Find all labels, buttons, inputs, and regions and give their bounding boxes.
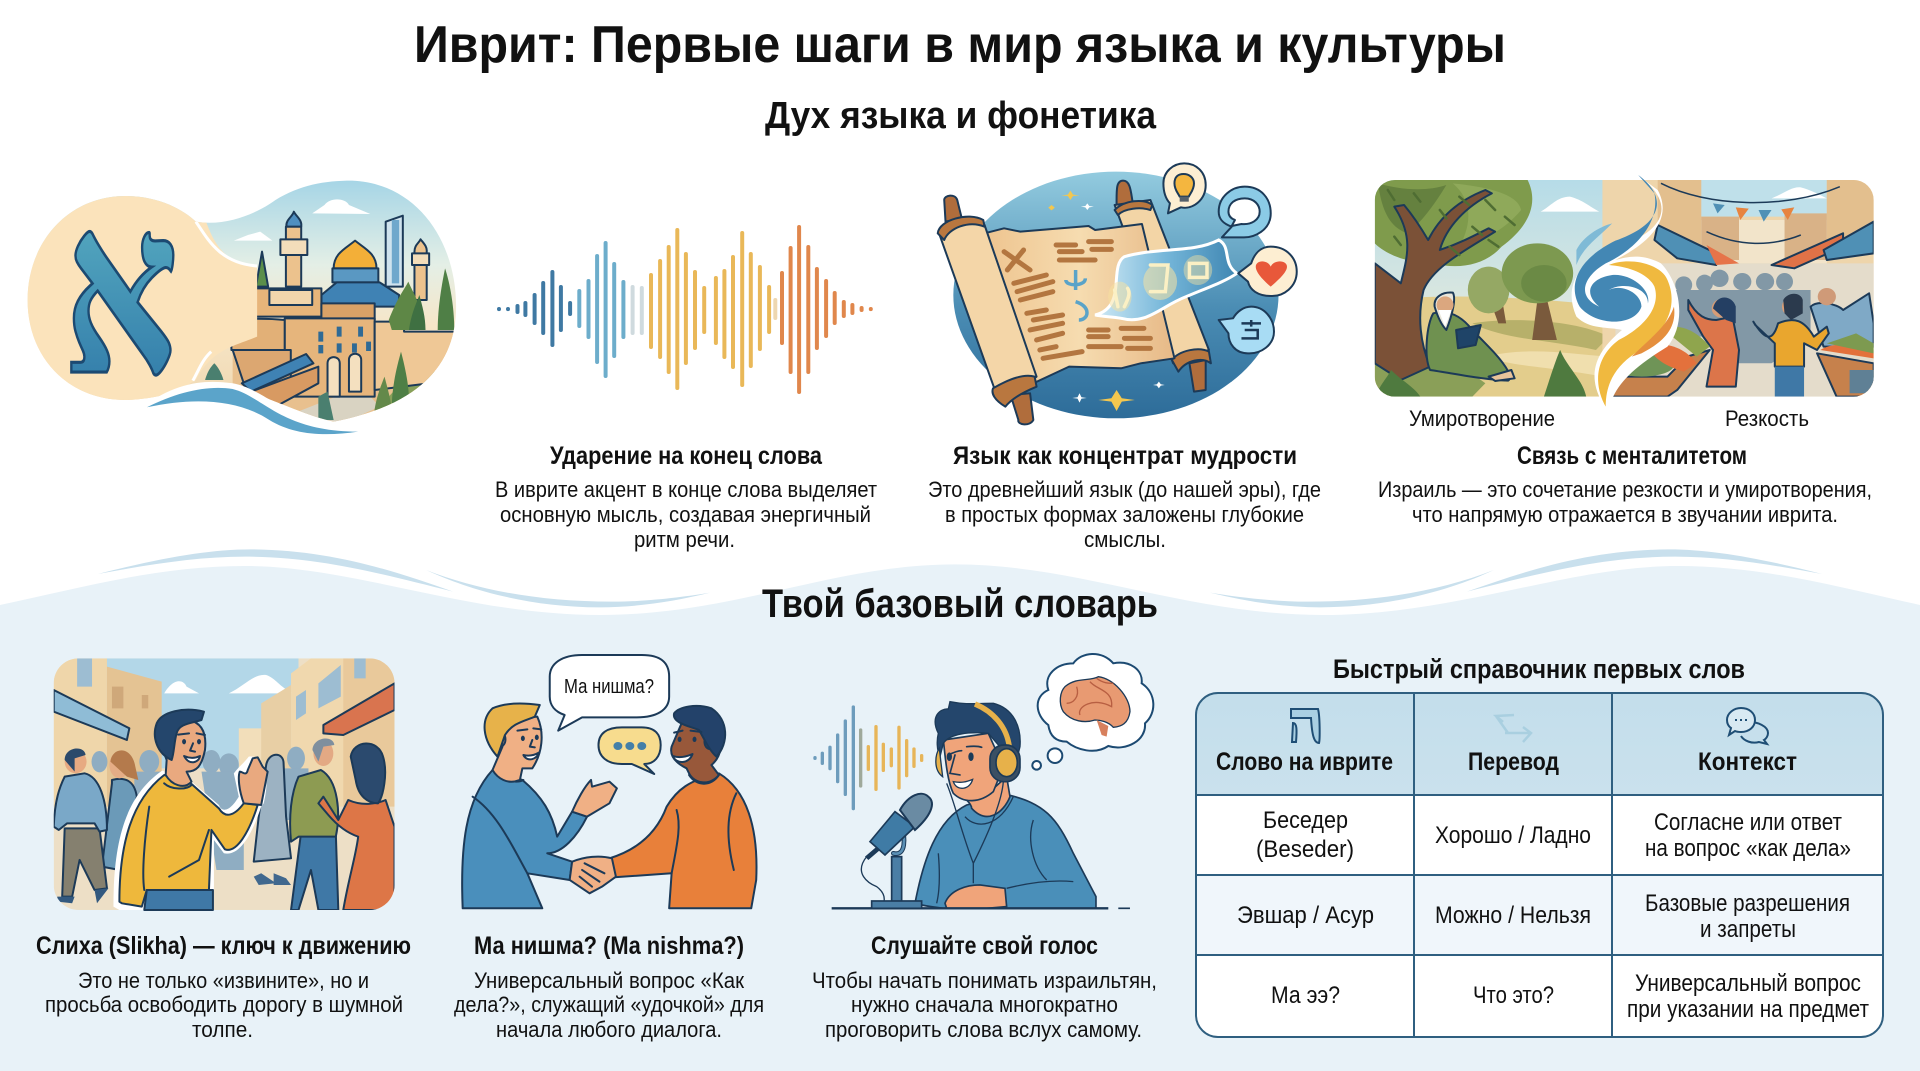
column text: В иврите акцент в конце слова выделяет	[495, 477, 877, 502]
row 1: на вопрос «как дела»	[1645, 835, 1851, 862]
header: hebrew word	[1216, 709, 1393, 776]
speech bubble text: Ма нишма?	[564, 676, 654, 698]
row 1: Хорошо / Ладно	[1435, 822, 1591, 849]
icon: letter aleph: א	[63, 160, 179, 424]
column text: ритм речи.	[634, 527, 735, 552]
row 3	[1271, 970, 1869, 1023]
header: context: Контекст	[1698, 748, 1797, 776]
header: hebrew word: Слово на иврите	[1216, 748, 1393, 776]
row 3: Универсальный вопрос	[1635, 970, 1861, 997]
column text: дела?», служащий «удочкой» для	[454, 992, 764, 1017]
header: translation	[1468, 715, 1559, 776]
column text: Это древнейший язык (до нашей эры), где	[928, 477, 1321, 502]
column text: проговорить слова вслух самому.	[825, 1017, 1142, 1042]
row 3: при указании на предмет	[1627, 996, 1869, 1023]
row 1: (Beseder)	[1256, 836, 1354, 863]
sound wave chart	[499, 227, 871, 392]
header: context	[1698, 708, 1797, 776]
column text: в простых формах заложены глубокие	[945, 502, 1304, 527]
column: hear your own voice	[812, 654, 1157, 1042]
skyline	[386, 216, 403, 287]
section heading: spirit of the language: Дух языка и фонетика	[765, 95, 1157, 137]
column text: просьба освободить дорогу в шумной	[45, 992, 403, 1017]
illustration: crowded street	[54, 658, 395, 910]
section heading: basic vocabulary: Твой базовый словарь	[762, 582, 1158, 626]
row 1	[1256, 807, 1851, 863]
row 3: Что это?	[1473, 982, 1554, 1009]
column text: Израиль — это сочетание резкости и умиротворения,	[1378, 477, 1872, 502]
column: slikha	[36, 658, 411, 1042]
label: sharpness: Резкость	[1725, 406, 1809, 431]
row 3: Ма ээ?	[1271, 982, 1340, 1009]
row 1: Согласне или ответ	[1654, 809, 1842, 836]
lower section background waves	[0, 549, 1920, 1071]
row 1: Беседер	[1263, 807, 1348, 834]
column text: Это не только «извините», но и	[78, 968, 369, 993]
column text: основную мысль, создавая энергичный	[500, 502, 871, 527]
illustration: aleph and Jerusalem	[28, 180, 456, 434]
column text: что напрямую отражается в звучании иврита.	[1412, 502, 1838, 527]
column: language as concentrated wisdom	[928, 163, 1321, 552]
column heading: Ма нишма? (Ma nishma?)	[474, 932, 744, 960]
row 2: и запреты	[1700, 916, 1796, 943]
column heading: Слиха (Slikha) — ключ к движению	[36, 932, 411, 960]
column text: начала любого диалога.	[496, 1017, 722, 1042]
row 2: Можно / Нельзя	[1435, 902, 1591, 929]
illustration: calm and sharpness	[1375, 173, 1876, 408]
illustration: man with microphone	[815, 654, 1153, 908]
column heading: Ударение на конец слова	[550, 442, 823, 470]
row 2: Эвшар / Асур	[1237, 902, 1374, 929]
column: connection to mentality	[1375, 173, 1876, 527]
column text: толпе.	[192, 1017, 253, 1042]
table backgrounds	[1196, 693, 1883, 1037]
column: ma nishma	[454, 655, 764, 1042]
row 2: Базовые разрешения	[1645, 890, 1850, 917]
column heading: Связь с менталитетом	[1517, 442, 1747, 470]
column text: нужно сначала многократно	[851, 992, 1118, 1017]
column heading: Слушайте свой голос	[871, 932, 1098, 960]
quick reference table	[1196, 654, 1883, 1037]
column text: Чтобы начать понимать израильтян,	[812, 968, 1157, 993]
illustration: torah scroll	[938, 163, 1297, 424]
label: calm: Умиротворение	[1409, 406, 1555, 431]
header: translation: Перевод	[1468, 748, 1559, 776]
column heading: Язык как концентрат мудрости	[953, 442, 1297, 470]
column text: смыслы.	[1084, 527, 1166, 552]
column text: Универсальный вопрос «Как	[474, 968, 744, 993]
title: Иврит: Первые шаги в мир языка и культуры	[414, 16, 1506, 74]
table heading: Быстрый справочник первых слов	[1333, 654, 1745, 684]
row 2	[1237, 890, 1850, 943]
column: stress at word end	[495, 227, 877, 552]
illustration: two men shaking hands	[462, 655, 757, 908]
